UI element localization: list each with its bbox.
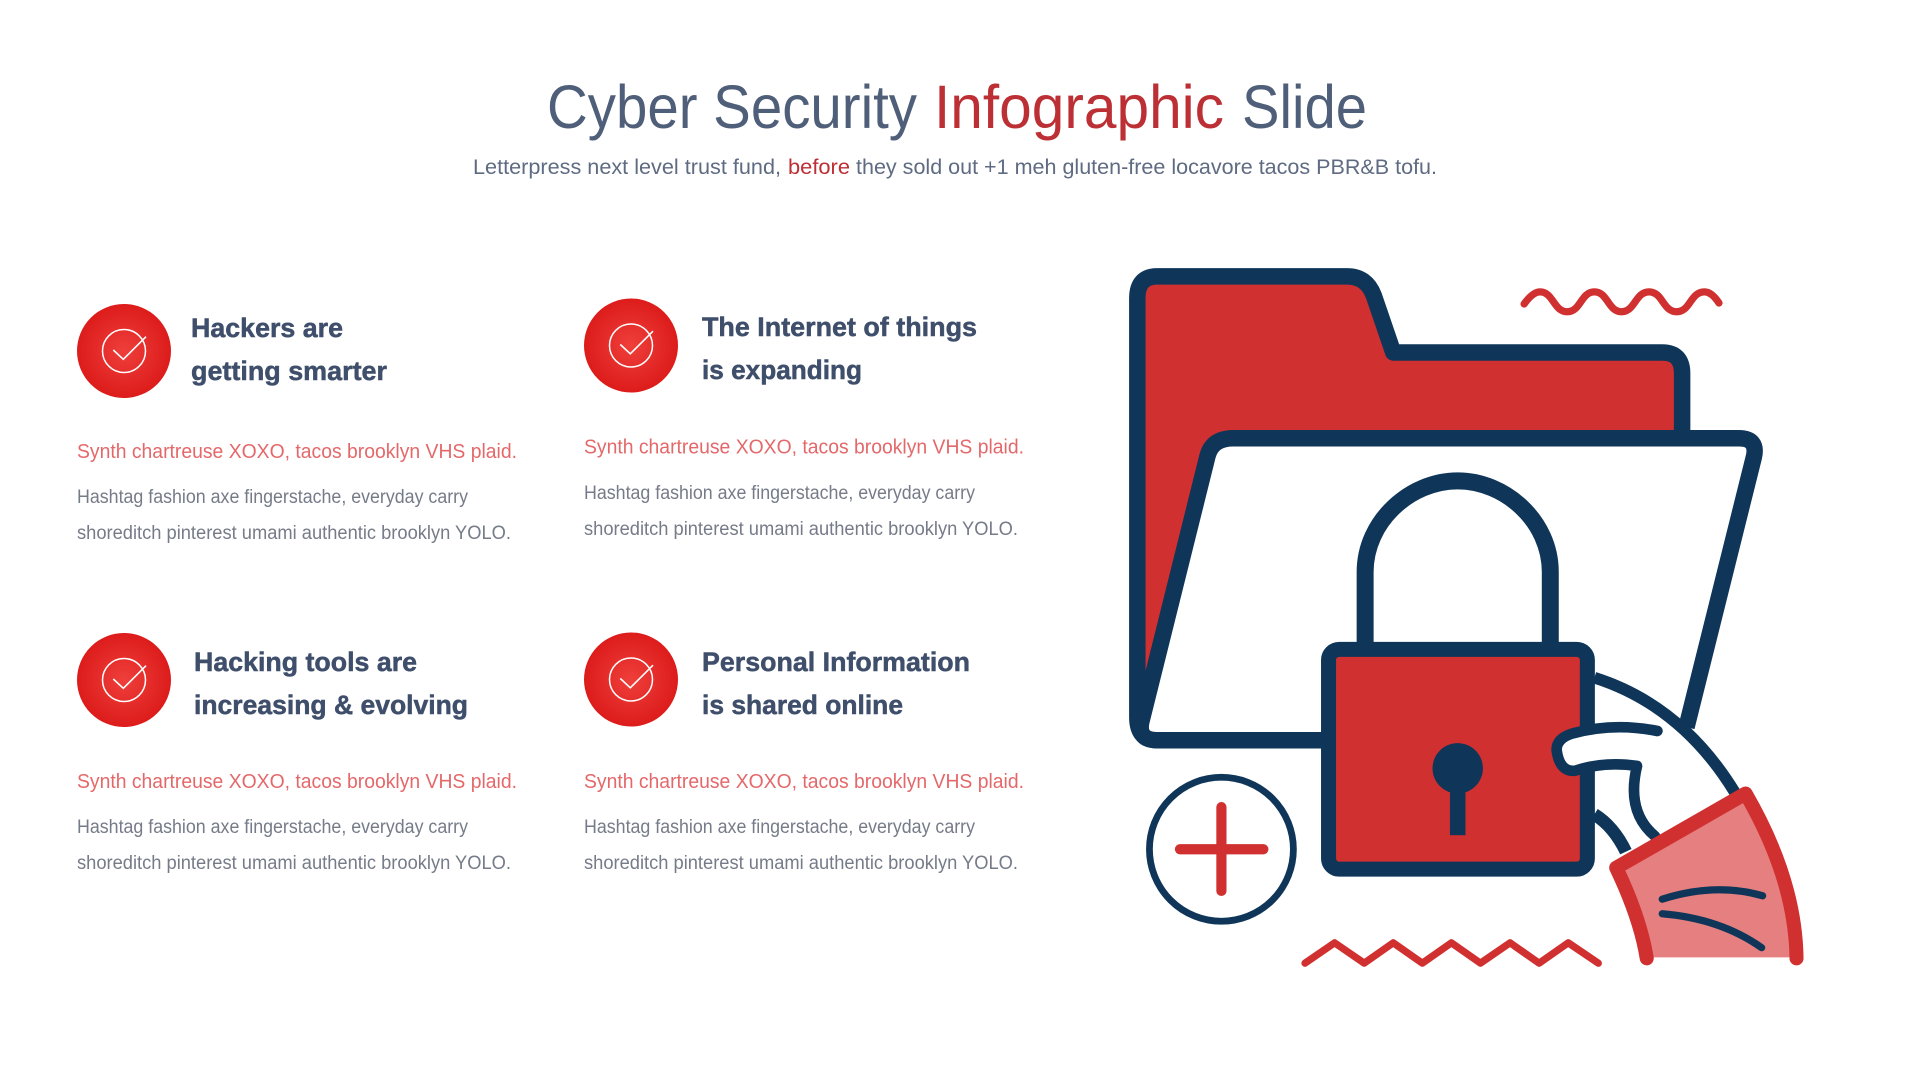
title (547, 73, 1367, 141)
panel: hacking tools (77, 633, 517, 874)
heading: increasing & evolving (194, 690, 468, 720)
heading: The Internet of things (702, 312, 977, 342)
icon: check circle (584, 298, 678, 392)
red subheading: Synth chartreuse XOXO, tacos brooklyn VHS plaid. (584, 436, 1024, 458)
title: Cyber Security (547, 73, 917, 141)
keyhole (1433, 743, 1483, 835)
body text (584, 483, 1018, 540)
finger (1557, 727, 1682, 836)
heading (194, 647, 468, 720)
body text: Hashtag fashion axe fingerstache, everyday carry (77, 817, 468, 838)
heading: is shared online (702, 690, 903, 720)
subtitle (473, 156, 1437, 179)
icon: check circle (77, 633, 171, 727)
sleeve (1616, 794, 1797, 958)
panel: internet of things (584, 298, 1024, 540)
subtitle: before (788, 156, 850, 179)
body text (584, 817, 1018, 874)
body text (77, 817, 511, 874)
folder front (1141, 438, 1755, 740)
red subheading: Synth chartreuse XOXO, tacos brooklyn VHS plaid. (77, 440, 517, 463)
illustration: folder with padlock (1137, 276, 1797, 963)
panel: hackers are getting smarter (77, 304, 517, 544)
heading (702, 312, 977, 385)
title: Slide (1242, 73, 1367, 141)
squiggle top (1524, 292, 1719, 312)
padlock body (1329, 649, 1587, 869)
heading (702, 647, 970, 720)
heading: Personal Information (702, 647, 970, 677)
subtitle: they sold out +1 meh gluten-free locavore tacos PBR&B tofu. (856, 156, 1437, 179)
body text: Hashtag fashion axe fingerstache, everyday carry (584, 483, 975, 504)
padlock shackle (1365, 481, 1550, 647)
title: Infographic (934, 73, 1224, 141)
folder back (1137, 276, 1682, 740)
heading: Hackers are (191, 313, 343, 343)
hand (1594, 678, 1735, 856)
finger outline (1557, 727, 1657, 836)
icon: check circle (77, 304, 171, 398)
heading (191, 313, 387, 386)
body text: shoreditch pinterest umami authentic brooklyn YOLO. (77, 523, 511, 544)
heading: is expanding (702, 355, 862, 385)
zigzag bottom (1305, 943, 1598, 963)
heading: getting smarter (191, 356, 387, 386)
icon: check circle (584, 632, 678, 726)
red subheading: Synth chartreuse XOXO, tacos brooklyn VHS plaid. (77, 770, 517, 793)
panel: personal information (584, 632, 1024, 874)
body text (77, 487, 511, 544)
subtitle: Letterpress next level trust fund, (473, 156, 781, 179)
body text: Hashtag fashion axe fingerstache, everyday carry (77, 487, 468, 508)
body text: shoreditch pinterest umami authentic brooklyn YOLO. (584, 519, 1018, 540)
body text: Hashtag fashion axe fingerstache, everyday carry (584, 817, 975, 838)
red subheading: Synth chartreuse XOXO, tacos brooklyn VHS plaid. (584, 770, 1024, 793)
body text: shoreditch pinterest umami authentic brooklyn YOLO. (77, 853, 511, 874)
plus circle (1149, 777, 1293, 921)
heading: Hacking tools are (194, 647, 417, 677)
body text: shoreditch pinterest umami authentic brooklyn YOLO. (584, 853, 1018, 874)
